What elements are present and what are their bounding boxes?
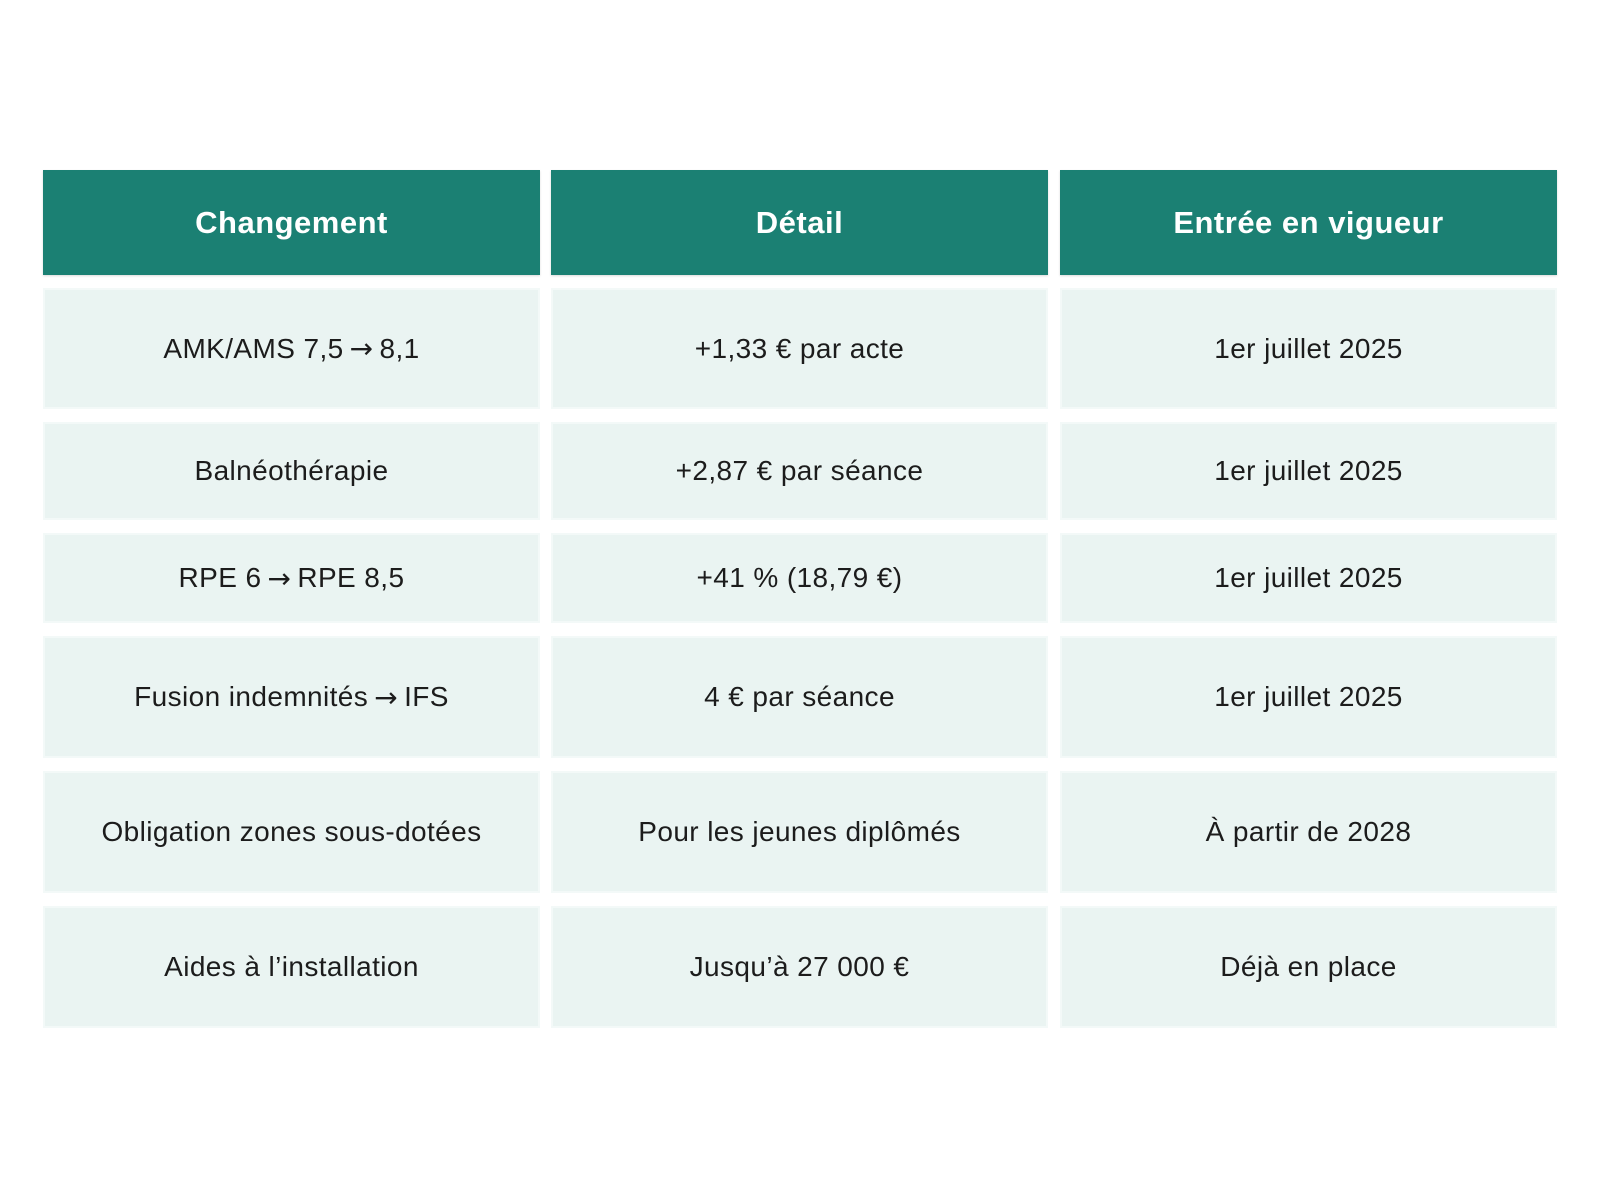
row 5: Pour les jeunes diplômés (638, 816, 961, 847)
row 6: Jusqu’à 27 000 € (690, 951, 909, 982)
row 2: 1er juillet 2025 (1214, 455, 1403, 486)
row 3: +41 % (18,79 €) (696, 562, 903, 593)
row 1: +1,33 € par acte (695, 332, 904, 364)
row 4: 4 € par séance (704, 681, 895, 712)
row 2 (43, 422, 1557, 520)
row 3 (43, 533, 1557, 623)
row 2: Balnéothérapie (194, 455, 388, 486)
header: Changement: Changement (195, 204, 388, 240)
header: Détail: Détail (756, 204, 843, 240)
row 1: AMK/AMS 7,5 8,1 (163, 332, 420, 364)
row 2: +2,87 € par séance (676, 455, 923, 486)
row 4: 1er juillet 2025 (1214, 681, 1403, 712)
row 5: À partir de 2028 (1206, 816, 1411, 847)
row 1: → (350, 332, 373, 365)
row 1: 1er juillet 2025 (1214, 332, 1403, 364)
row 5 (43, 771, 1557, 893)
row 6 (43, 906, 1557, 1028)
row 5: Obligation zones sous-dotées (101, 816, 482, 847)
row 3: RPE 6 RPE 8,5 (179, 562, 404, 593)
header: Entrée en vigueur: Entrée en vigueur (1173, 204, 1444, 240)
row 3: 1er juillet 2025 (1214, 562, 1403, 593)
row 6: Déjà en place (1220, 951, 1397, 982)
row 4: Fusion indemnités IFS (134, 681, 449, 712)
header: Détail (551, 170, 1048, 275)
row 3: → (267, 562, 291, 594)
header: Changement (43, 170, 540, 275)
row 1 (43, 288, 1557, 409)
header: Entrée en vigueur (1060, 170, 1557, 275)
row 4 (43, 636, 1557, 758)
row 4: → (374, 680, 398, 714)
row 6: Aides à l’installation (164, 951, 419, 982)
